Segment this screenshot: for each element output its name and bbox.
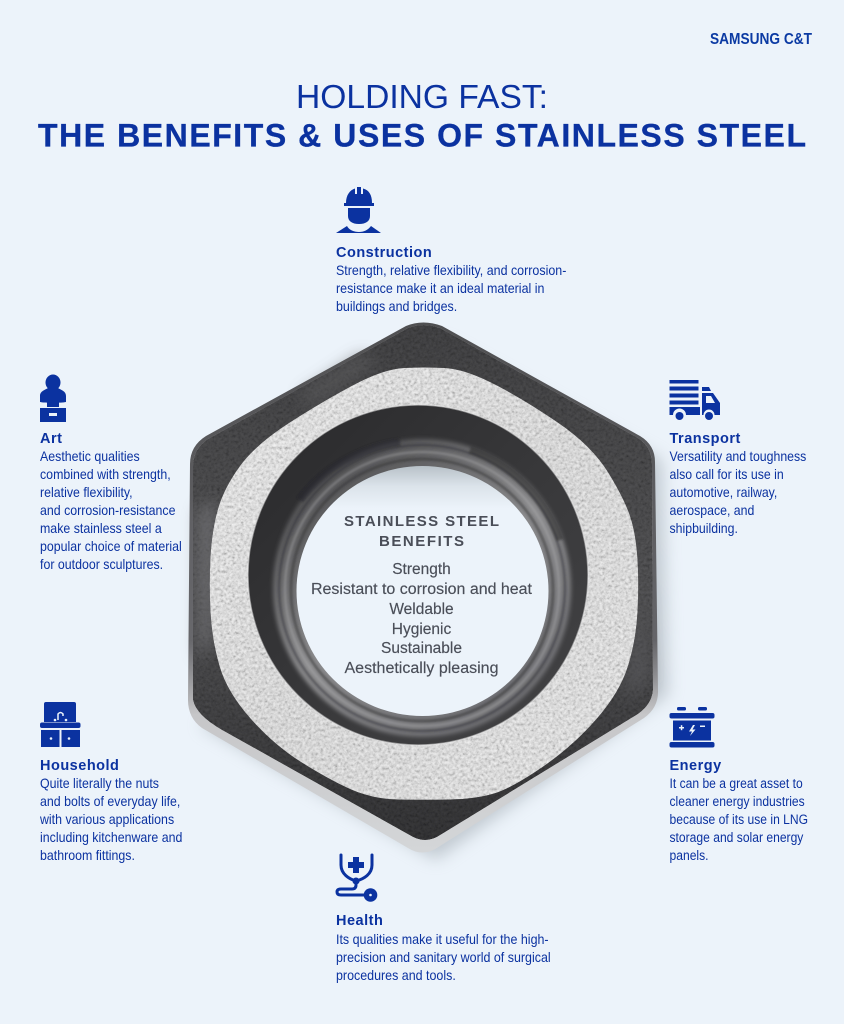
text: energy: Energy <box>670 758 722 774</box>
text: art: for outdoor sculptures. <box>40 556 163 572</box>
text: energy: storage and solar energy <box>670 829 804 845</box>
nut countersink dark ring <box>248 405 588 745</box>
icon: art bust <box>40 374 66 422</box>
nut shadow <box>200 340 668 860</box>
centre: stainless steel benefits: Hygienic <box>392 621 451 638</box>
text: health <box>336 913 551 983</box>
icon: health stethoscope <box>337 855 377 902</box>
nut centre hole <box>296 466 548 716</box>
centre: stainless steel benefits: BENEFITS <box>379 533 464 550</box>
icon: energy battery <box>670 707 714 748</box>
text: household <box>39 758 182 863</box>
text: household: and bolts of everyday life, <box>40 793 180 809</box>
icon: construction worker <box>336 187 381 233</box>
text: art: combined with strength, <box>40 466 171 482</box>
centre: stainless steel benefits: Resistant to corrosion and heat <box>311 581 533 598</box>
nut hexagon body <box>188 322 658 853</box>
text: household: Quite literally the nuts <box>40 775 159 791</box>
text: transport: also call for its use in <box>670 466 784 482</box>
nut dark facets <box>193 325 653 840</box>
centre: stainless steel benefits: Aesthetically pleasing <box>344 660 498 677</box>
text: art: make stainless steel a <box>40 520 162 536</box>
title: THE BENEFITS & USES OF STAINLESS STEEL <box>38 118 806 154</box>
nut thread ring <box>273 439 571 737</box>
centre: stainless steel benefits: STAINLESS STEEL <box>344 513 499 530</box>
text: transport <box>670 431 807 536</box>
nut grey facet highlights <box>198 355 648 700</box>
icon: household kitchen cabinet <box>40 702 80 747</box>
text: energy: panels. <box>670 847 709 863</box>
text: construction: resistance make it an ideal material in <box>336 280 544 296</box>
hex nut illustration <box>188 322 668 860</box>
text: health: Health <box>336 913 383 929</box>
text: art: relative flexibility, <box>40 484 133 500</box>
centre: stainless steel benefits <box>311 513 533 677</box>
text: construction: buildings and bridges. <box>336 298 457 314</box>
text: construction: Construction <box>336 245 432 261</box>
text: household: Household <box>40 758 119 774</box>
text: health: Its qualities make it useful for the high- <box>336 931 549 947</box>
text: household: bathroom fittings. <box>40 847 135 863</box>
title <box>38 78 806 154</box>
text: health: procedures and tools. <box>336 967 456 983</box>
text: transport: automotive, railway, <box>670 484 777 500</box>
nut thread lines <box>279 442 565 731</box>
text: energy: cleaner energy industries <box>670 793 805 809</box>
title: HOLDING FAST: <box>296 78 548 115</box>
text: art: Art <box>40 431 62 447</box>
centre: stainless steel benefits: Sustainable <box>381 640 462 657</box>
text: construction: Strength, relative flexibility, and corrosion- <box>336 262 566 278</box>
text: art: Aesthetic qualities <box>40 448 140 464</box>
text: art <box>40 431 182 572</box>
centre: stainless steel benefits: Weldable <box>389 601 454 618</box>
text: household: including kitchenware and <box>40 829 182 845</box>
text: energy <box>670 758 808 863</box>
text: art: popular choice of material <box>40 538 182 554</box>
logo: Samsung C&T: SAMSUNG C&T <box>710 31 812 48</box>
icon: transport truck <box>670 380 720 420</box>
centre: stainless steel benefits: Strength <box>392 561 451 578</box>
text: energy: It can be a great asset to <box>670 775 803 791</box>
text: energy: because of its use in LNG <box>670 811 808 827</box>
text: construction <box>336 245 566 314</box>
text: transport: Transport <box>670 431 741 447</box>
text: transport: shipbuilding. <box>670 520 738 536</box>
text: transport: Versatility and toughness <box>670 448 807 464</box>
text: art: and corrosion-resistance <box>40 502 176 518</box>
text: health: precision and sanitary world of surgical <box>336 949 551 965</box>
text: transport: aerospace, and <box>670 502 754 518</box>
text: household: with various applications <box>39 811 175 827</box>
nut flat ring face <box>210 368 638 800</box>
